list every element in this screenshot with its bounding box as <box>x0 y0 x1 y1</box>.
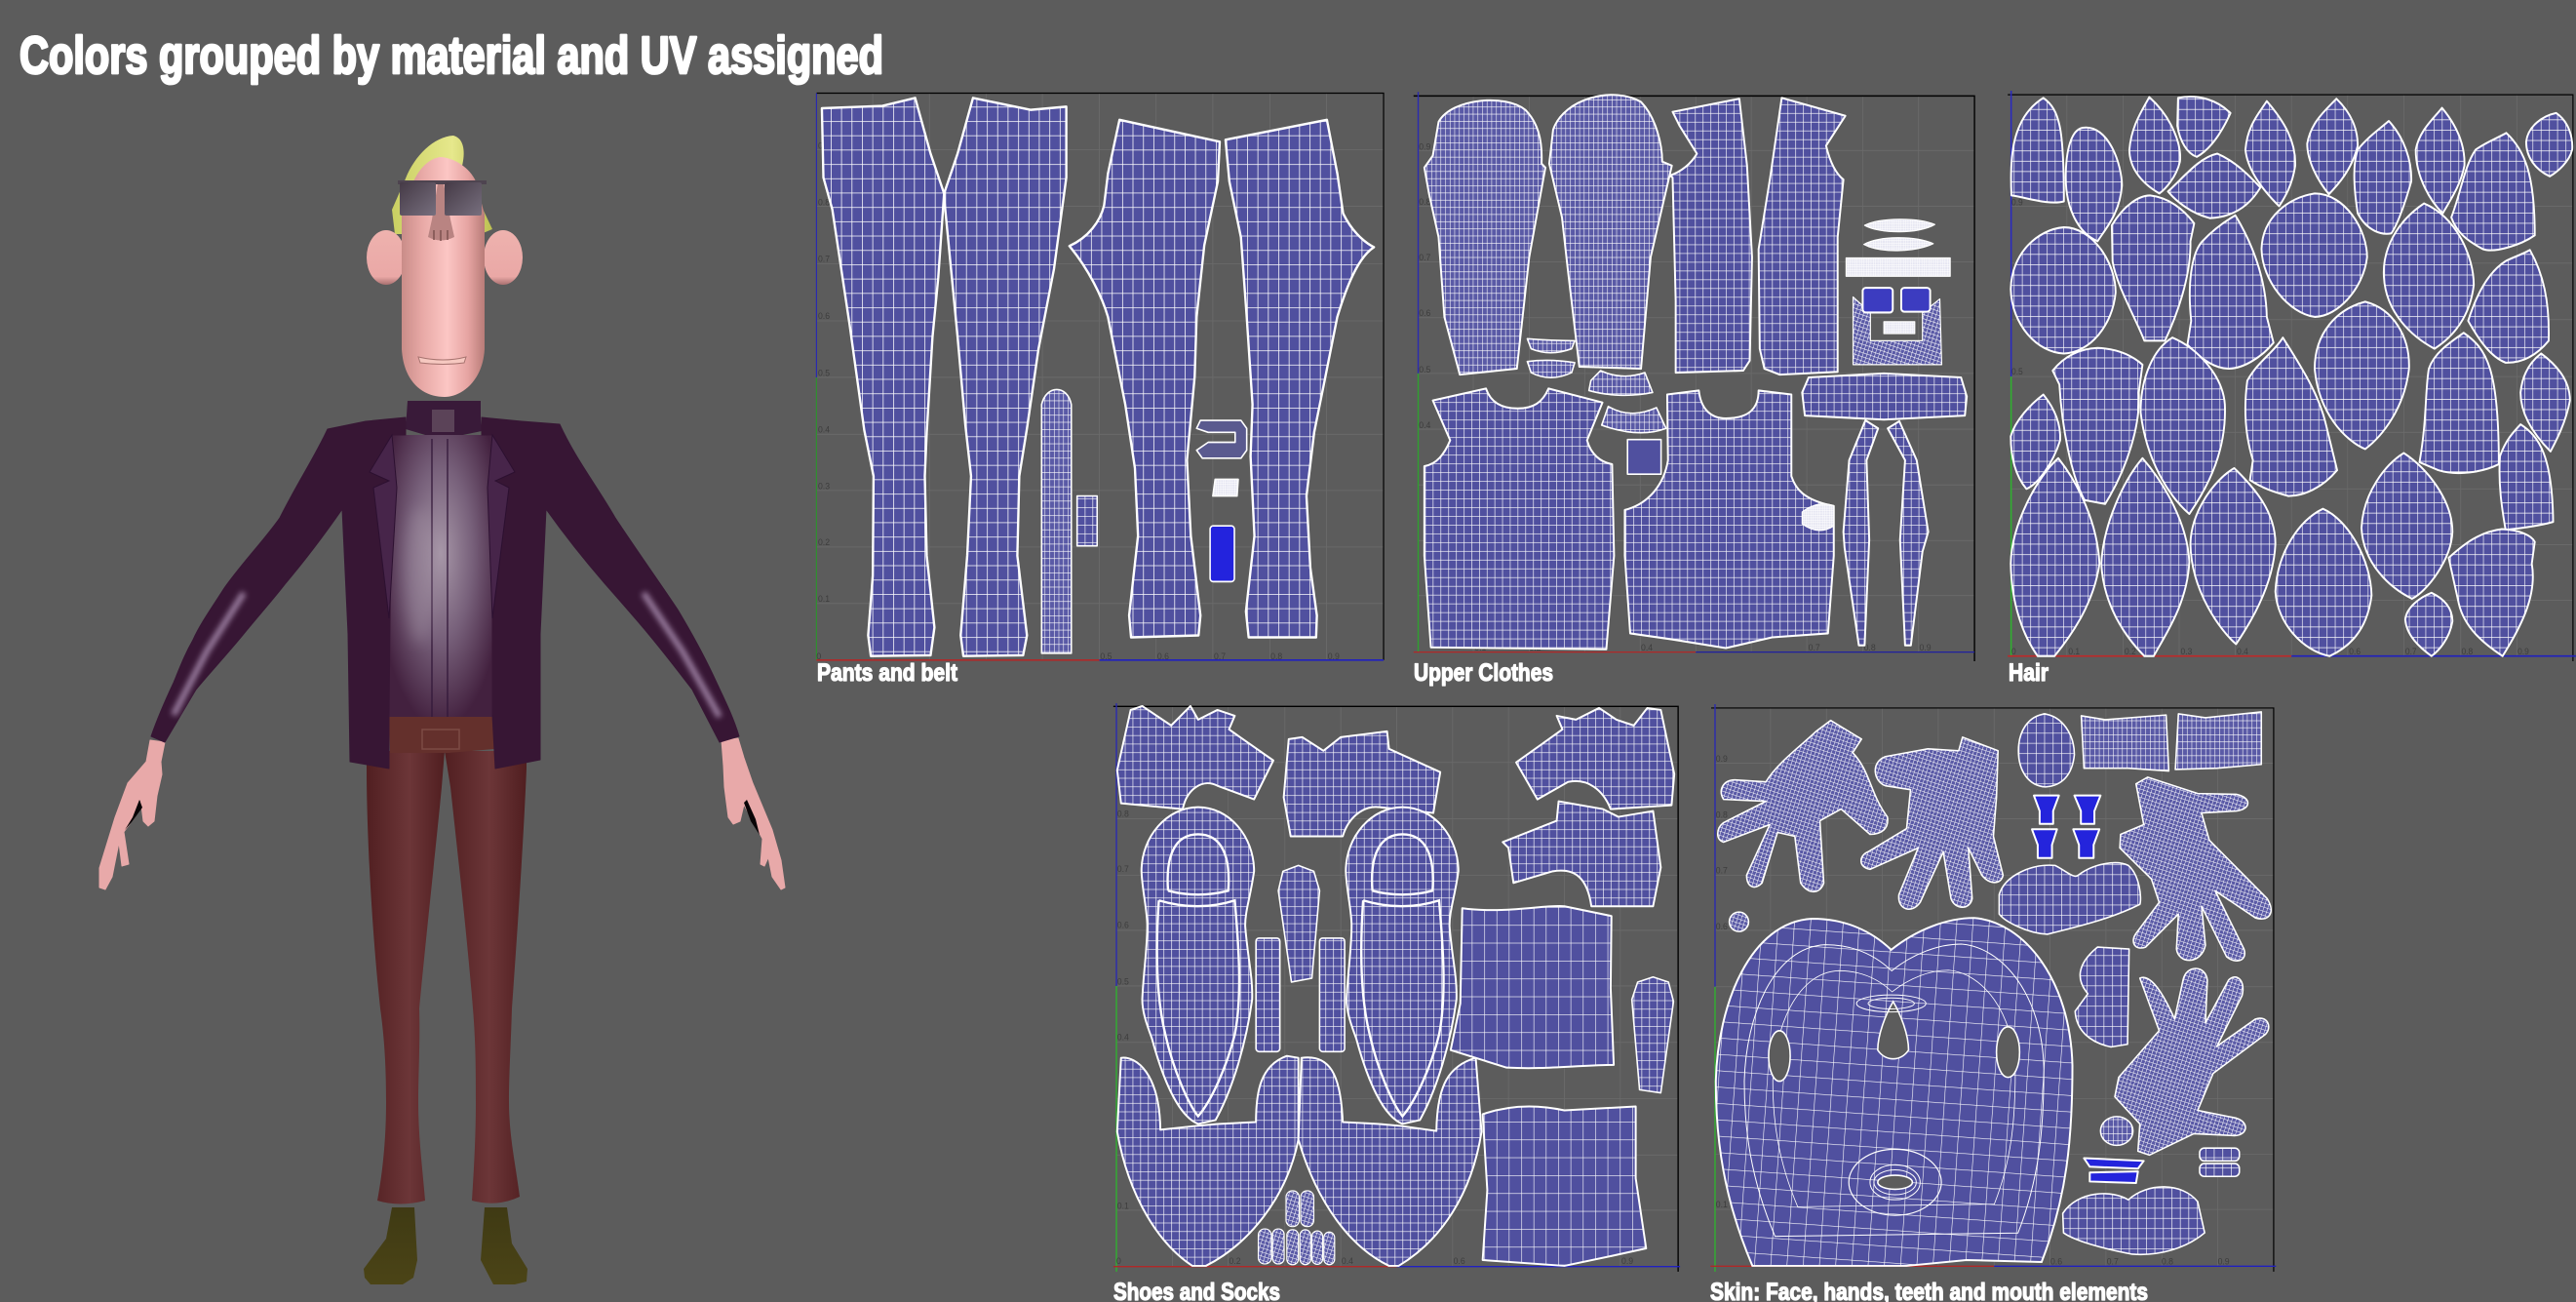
vest and jacket pieces <box>1425 98 1967 650</box>
jacket and arms <box>151 417 739 769</box>
axis labels <box>1116 809 1633 1266</box>
axis labels: 0.1 <box>1474 643 1486 652</box>
axis labels: 0.7 <box>1809 643 1820 652</box>
shirt glow <box>405 507 434 644</box>
small collar and lens pieces <box>1527 338 1666 474</box>
axis labels: 0.8 <box>1565 1256 1577 1266</box>
axis labels: 0.4 <box>818 424 830 434</box>
axis labels: 0.7 <box>818 254 830 264</box>
axis labels: 0.4 <box>1342 1256 1353 1266</box>
UV frame and grid <box>2008 91 2576 661</box>
collar <box>406 401 482 437</box>
axis labels: 0.7 <box>2107 1257 2119 1267</box>
belt <box>389 715 494 753</box>
axis labels: 0.8 <box>1419 197 1430 207</box>
axis labels: 0 <box>816 651 821 661</box>
UV frame and grid <box>1113 703 1680 1272</box>
sleeves <box>1425 95 1672 375</box>
axis labels: 0 <box>1116 1256 1121 1266</box>
laces and tongues <box>1256 865 1673 1093</box>
axis labels: 0.6 <box>1419 308 1430 318</box>
axis labels: 0.8 <box>1117 809 1129 819</box>
axis labels: 0.1 <box>818 594 830 604</box>
axis labels: 0.8 <box>1864 643 1876 652</box>
label: pants and belt: Pants and belt <box>817 659 958 687</box>
axis labels: 0.8 <box>818 197 830 208</box>
axis labels: 0.2 <box>2125 647 2136 656</box>
face <box>1716 918 2073 1266</box>
ears <box>367 230 523 285</box>
axis labels: 0.2 <box>1529 643 1542 652</box>
axis labels: 0.7 <box>1117 864 1129 874</box>
label: upper clothes: Upper Clothes <box>1414 659 1553 687</box>
hand shadows <box>125 800 760 835</box>
hair <box>392 136 492 234</box>
axis labels <box>816 141 1340 661</box>
title: Colors grouped by material and UV assigned <box>20 26 883 85</box>
panel: hair UVs <box>2008 91 2576 661</box>
lapels <box>370 435 515 618</box>
face mesh contours <box>1744 944 2044 1237</box>
label: hair: Hair <box>2009 659 2049 687</box>
sole inner outlines <box>1157 834 1444 1116</box>
axis labels: 0.4 <box>1117 1033 1129 1043</box>
axis labels: 0.3 <box>818 481 830 491</box>
nose <box>428 183 454 241</box>
axis labels: 0.7 <box>2405 647 2417 656</box>
left hand <box>99 740 165 889</box>
axis labels: 0.3 <box>2181 647 2192 656</box>
ear, scalp and mouth pieces <box>1999 712 2261 1254</box>
mouth <box>418 357 466 365</box>
panel: shoes and socks UVs <box>1113 703 1680 1272</box>
axis labels: 0.7 <box>1419 253 1430 262</box>
axis labels: 0.6 <box>1157 651 1169 661</box>
axis labels: 0.7 <box>1716 866 1728 876</box>
pants <box>367 751 527 1203</box>
axis labels: 0.1 <box>1716 1200 1728 1209</box>
axis labels: 0.5 <box>1117 977 1129 987</box>
axis labels: 0 <box>2011 647 2016 656</box>
soles <box>1117 808 1481 1266</box>
UV frame and grid <box>1414 92 1974 661</box>
axis labels: 0.9 <box>2218 1257 2230 1267</box>
axis labels: 0.9 <box>1716 754 1728 764</box>
axis labels: 0.8 <box>1716 809 1728 819</box>
3D character model <box>99 136 785 1284</box>
axis labels: 0.9 <box>1419 141 1430 152</box>
axis labels: 0.6 <box>2349 647 2361 656</box>
head <box>402 157 485 397</box>
eyelets <box>1259 1191 1335 1265</box>
axis labels: 0.4 <box>1419 420 1430 430</box>
axis labels: 0.4 <box>1641 643 1653 652</box>
axis labels <box>1419 141 1932 652</box>
pants pieces <box>822 98 1374 656</box>
axis labels: 0.1 <box>1117 1201 1129 1210</box>
axis labels: 0.9 <box>2517 647 2529 656</box>
shirt seams <box>432 439 448 717</box>
axis labels: 0.8 <box>2162 1257 2173 1267</box>
axis labels: 0.8 <box>1270 651 1282 661</box>
axis labels: 0.4 <box>2237 647 2248 656</box>
axis labels <box>2011 197 2529 656</box>
hands <box>1718 721 2271 1155</box>
right hand <box>722 738 785 889</box>
axis labels: 0.9 <box>2011 197 2023 208</box>
belt pieces <box>1041 389 1247 653</box>
axis labels: 0.6 <box>818 311 830 321</box>
axis labels: 0.6 <box>1716 922 1728 931</box>
axis labels: 0.5 <box>1100 651 1112 661</box>
axis labels: 0.2 <box>1229 1256 1241 1266</box>
axis labels: 0.7 <box>1214 651 1226 661</box>
socks <box>1451 906 1646 1266</box>
shoe uppers <box>1117 706 1674 906</box>
arm highlights <box>174 593 720 717</box>
axis labels: 0.1 <box>2068 647 2080 656</box>
face openings <box>1769 1002 2019 1082</box>
UV frame and grid <box>1710 704 2276 1272</box>
axis labels: 0.5 <box>1419 365 1430 375</box>
axis labels: 0.6 <box>1117 921 1129 930</box>
panel: skin UVs <box>1710 704 2276 1272</box>
shirt <box>389 435 492 717</box>
shoes <box>364 1207 527 1284</box>
axis labels: 0.6 <box>2050 1257 2062 1267</box>
axis labels <box>1716 754 2230 1267</box>
white dense pieces <box>1802 219 1950 531</box>
hair pieces <box>2010 97 2572 656</box>
glasses pieces <box>1862 288 1931 312</box>
axis labels: 0.9 <box>1621 1256 1633 1266</box>
axis labels: 0.2 <box>818 537 830 547</box>
axis labels: 0.9 <box>1920 643 1932 652</box>
axis labels: 0.9 <box>1328 651 1340 661</box>
axis labels: 0.5 <box>818 368 830 377</box>
axis labels: 0.9 <box>818 141 830 151</box>
panel: pants and belt UVs <box>816 94 1384 661</box>
axis labels: 0.8 <box>2461 647 2473 656</box>
UV frame and grid <box>816 94 1384 660</box>
axis labels: 0.5 <box>2011 367 2023 376</box>
teeth pieces <box>2032 796 2144 1183</box>
panel: upper clothes UVs <box>1414 92 1974 661</box>
mouth ring <box>1856 995 1926 1200</box>
axis labels: 0.6 <box>1454 1256 1465 1266</box>
sunglasses <box>398 180 487 216</box>
